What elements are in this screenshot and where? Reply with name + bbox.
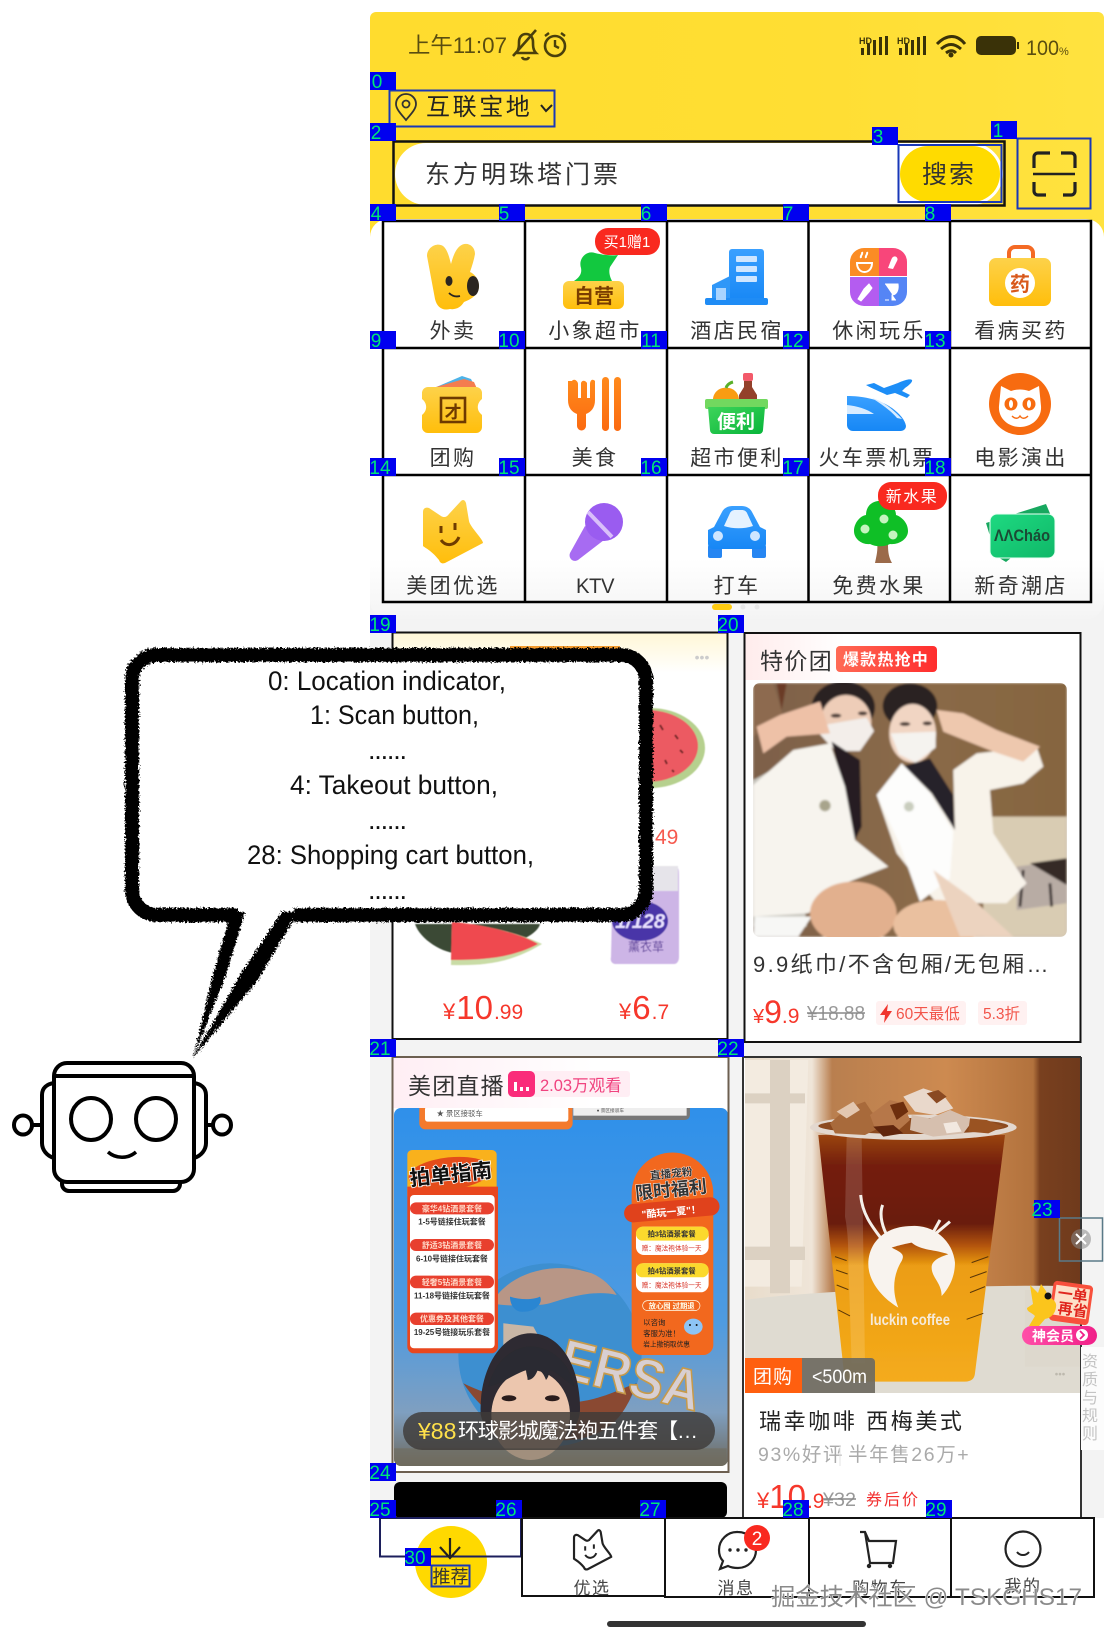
icon: group buy ticket: 才 [444,403,462,422]
bubble text: ...... [368,875,407,905]
product pill [403,1412,715,1450]
numbered element tags: 18 [924,458,946,479]
numbered element tags: 19 [369,615,391,636]
text: letters on globe: ERSA [554,1328,708,1424]
search bar: 东方明珠塔门票 [425,161,621,189]
panel: fruit deals card [392,632,728,1039]
price: ¥10.9 [756,1478,824,1515]
bubble text: 4: Takeout button, [290,770,498,800]
side tab: qualifications and rules: 规 [1082,1407,1098,1425]
category labels: 美团优选 [406,575,500,598]
icon: group buy ticket [422,376,482,433]
icon: medicine case: 药 [1010,273,1030,296]
numbered element tags: 26 [495,1500,517,1521]
right poster: 赠：魔法袍体验一天 [642,1280,702,1289]
icon: medicine case [989,247,1051,306]
luckin logo [861,1195,955,1329]
numbered element tags: 9 [371,331,381,352]
icon: youxuan tag [423,500,483,563]
category labels: 美食 [572,447,618,470]
home indicator [607,1621,866,1627]
right poster: 以咨询 [643,1318,665,1327]
icon: chao shop [986,504,1055,562]
numbered element tags: 14 [369,458,391,479]
category labels: 免费水果 [832,575,926,598]
category grid lines [383,221,1091,602]
tabs at top [419,1107,573,1129]
tag: 60 day low: 60天最低 [896,1005,960,1023]
numbered element tags: 13 [924,331,946,352]
watermelon slice [415,922,542,965]
watermark: 掘金技术社区 @ TSKGHS17 [771,1584,1082,1611]
heading: 美团直播 [408,1073,505,1099]
price: ¥9.9 [752,994,799,1030]
category labels: 超市便利 [690,447,784,470]
more dots: ••• [695,649,709,665]
icon: takeout bunny [427,244,479,310]
original price: ¥32 [822,1490,856,1511]
category labels: 小象超市 [548,320,642,343]
left jacket [753,743,888,917]
category labels: 看病买药 [974,320,1068,343]
luckin logo: luckin coffee [870,1312,950,1329]
numbered element tags: 16 [640,458,662,479]
tag: group buy [745,1358,802,1393]
icon: hotel [705,249,768,305]
status bar [408,30,1069,60]
bubble text: 28: Shopping cart button, [247,840,534,870]
watermelon half [595,708,705,788]
floating member promo [1022,1280,1097,1345]
product pill: ¥88 [417,1418,456,1444]
numbered element tags: 5 [499,204,509,225]
laundry detergent bag: 1/128 [615,911,666,933]
viewer count: 2.03万观看 [540,1076,622,1095]
category labels: KTV [576,575,614,598]
tab: messages [665,1518,809,1598]
left poster: 舒适3钻酒景套餐 [422,1240,482,1250]
numbered element tags: 15 [498,458,520,479]
numbered element tags [369,72,1060,1569]
tag: discount [978,1001,1027,1025]
right poster [623,1152,720,1355]
yellow header background [370,12,1104,240]
icon: chao shop: ΛΛCháo [994,527,1050,545]
numbered element tags: 25 [369,1500,391,1521]
title: 瑞幸咖啡 西梅美式 [759,1409,965,1434]
left poster: 11-18号链接住玩套餐 [414,1290,490,1300]
right woman head [883,683,937,729]
side tab: qualifications and rules: 与 [1082,1389,1098,1407]
tab: messages: 2 [752,1529,762,1550]
icon: taxi [708,506,766,558]
location indicator [390,90,554,126]
tag: 60 day low [876,1001,966,1025]
category labels: 休闲玩乐 [832,320,926,343]
status bar: HD [859,36,872,46]
bubble text: 0: Location indicator, [268,666,506,696]
floating member promo: 神会员 [1032,1328,1074,1344]
icon: robot [14,1063,231,1191]
icon: KTV microphone [570,503,623,561]
left woman head [811,683,876,719]
title: 9.9纸巾/不含包厢/无包厢… [753,952,1050,977]
panel: luckin coffee card: 半年售26万+ [848,1444,970,1466]
phone background [370,570,1104,1518]
icon: convenience basket: 便利 [717,411,755,433]
tab: mine: 我的 [1004,1577,1042,1596]
tab: recommended [380,1518,521,1598]
numbered element tags: 11 [641,331,661,352]
numbered element tags: 29 [925,1500,947,1521]
left poster: 19-25号链接玩乐套餐 [414,1327,490,1337]
tab: messages: 消息 [718,1579,754,1598]
status bar: HD [897,36,910,46]
right poster: 直播宠粉 [649,1165,693,1183]
side tab: qualifications and rules: 质 [1082,1371,1098,1389]
right jacket [877,747,1043,903]
laundry detergent bag: 薰衣草 [628,939,664,954]
side tab: qualifications and rules: 资 [1082,1353,1098,1371]
location indicator: 互联宝地 [426,94,532,121]
viewer count [508,1071,630,1097]
numbered element tags: 10 [498,331,520,352]
panel: special deal card [744,633,1081,1042]
after coupon text: 券后价 [866,1491,920,1509]
numbered element tags: 2 [371,123,381,144]
bubble text: ...... [368,805,407,835]
icon: supermarket plant and pot [563,252,624,309]
tab: youxuan [522,1518,665,1598]
tag: distance [802,1358,875,1393]
numbered element tags: 8 [925,204,935,225]
black collars [832,742,862,840]
tab: shopping cart [809,1518,951,1598]
category labels: 团购 [430,447,476,470]
bottom tab bar background [370,1518,1104,1645]
numbered element tags: 30 [404,1548,426,1569]
subtitle: 93%好评 [758,1444,844,1466]
icon: supermarket plant and pot: 自营 [574,285,614,308]
left poster: 豪华4钻酒景套餐 [422,1203,482,1213]
badge: new fruit: 新水果 [886,488,938,506]
badge: hot sale: 爆款热抢中 [843,650,929,669]
numbered element tags: 4 [371,204,382,225]
numbered element tags: 0 [372,72,382,93]
numbered element tags: 6 [641,204,651,225]
original price: ¥18.88 [806,1003,865,1025]
floating member promo: 一单 [1057,1285,1089,1306]
right poster: 拍3钻酒景套餐 [648,1230,696,1239]
bubble text [247,666,534,905]
right poster: 赠：魔法袍体验一天 [642,1244,702,1253]
numbered element tags: 28 [782,1500,804,1521]
badge: hot sale [836,646,937,672]
left poster: 轻奢5钻酒景套餐 [422,1277,482,1287]
icon: movie cat [989,373,1051,435]
side tab: qualifications and rules [1081,1347,1104,1450]
panel: luckin coffee card [743,1057,1082,1518]
category labels: 新奇潮店 [974,575,1068,598]
category labels: 酒店民宿 [690,320,784,343]
right poster: 拍4钻酒景套餐 [648,1267,696,1276]
scan button [1018,138,1090,208]
category labels: 火车票机票 [818,447,936,470]
bubble text: 1: Scan button, [310,700,479,730]
numbered element tags: 22 [717,1039,739,1060]
search button: 搜索 [922,161,976,189]
floating close button [1060,1218,1102,1261]
tag: group buy: 团购 [753,1366,793,1388]
bubble text: ...... [368,735,407,765]
globe [458,1263,642,1447]
icon: leisure [850,248,907,306]
numbered element tags: 24 [369,1463,391,1484]
category labels: 电影演出 [974,447,1068,470]
status bar: 上午11:07 [408,33,507,58]
price: 10.99: ¥10.99 [442,989,523,1026]
heading: 特价团 [760,648,833,674]
right poster: "酷玩一夏"！ [641,1203,701,1221]
panel: meituan live card [392,1057,729,1472]
photo: two women in white jackets [753,681,1067,950]
badge: new fruit [878,482,947,510]
numbered element tags: 7 [783,204,793,225]
left poster: 1-5号链接住玩套餐 [418,1217,486,1227]
live photo [393,1107,728,1467]
live photo: ● 景区接驳车 [597,1107,624,1114]
category labels: 打车 [714,575,760,598]
left poster [407,1150,498,1353]
product pill: 环球影城魔法袍五件套【… [458,1420,698,1443]
side tab: qualifications and rules: 则 [1082,1425,1098,1443]
numbered element tags: 27 [639,1500,661,1521]
tab: recommended: 推荐 [432,1567,468,1587]
tag: discount: 5.3折 [983,1005,1020,1023]
white grid background [370,219,1104,619]
numbered element tags: 12 [782,331,804,352]
numbered element tags: 3 [873,127,883,148]
category labels: 外卖 [430,320,476,343]
tab: mine [951,1518,1094,1597]
coffee photo [745,1058,1082,1393]
right poster: 岩上撤销取优惠 [643,1340,690,1349]
price: 6.7: ¥6.7 [618,989,669,1026]
badge: buy one get one [595,228,660,255]
black card placeholder [394,1482,727,1518]
icon: convenience basket [705,373,768,434]
speech bubble [132,655,646,1058]
numbered element tags: 17 [782,458,804,479]
icon: food fork and chopsticks [568,377,621,431]
status bar: % [1059,46,1069,58]
presenter [481,1333,580,1460]
numbered element tags: 21 [369,1039,391,1060]
page indicator dots [712,604,760,610]
icon: free fruit tree [854,501,908,563]
price fragment: 49 [655,826,678,849]
badge: buy one get one: 买1赠1 [604,234,650,251]
right poster: 限时福利 [634,1176,708,1204]
tab: shopping cart: 购物车 [852,1579,908,1598]
numbered element tags: 23 [1031,1200,1053,1221]
tag: distance: <500m [812,1367,867,1388]
live photo: ★ 景区接驳车 [437,1109,483,1118]
left poster: 6-10号链接住玩套餐 [416,1253,488,1263]
laundry detergent bag [611,866,679,964]
ice cubes [830,1088,1003,1137]
search button [898,145,1002,202]
search bar [394,142,1004,206]
status bar: 100 [1026,37,1059,60]
category labels [406,320,1068,598]
right poster: 客服为准！ [643,1329,680,1338]
coffee photo: ••• [1055,1369,1066,1380]
floating member promo: 再省 [1057,1300,1089,1321]
icon: train and plane [847,379,912,431]
left poster: 拍单指南 [409,1159,493,1191]
tab: youxuan: 优选 [574,1579,610,1598]
numbered element tags: 20 [717,615,739,636]
numbered element tags: 1 [993,121,1003,142]
right poster: 放心囤 过期退 [649,1301,695,1310]
left poster: 优惠券及其他套餐 [420,1314,484,1324]
